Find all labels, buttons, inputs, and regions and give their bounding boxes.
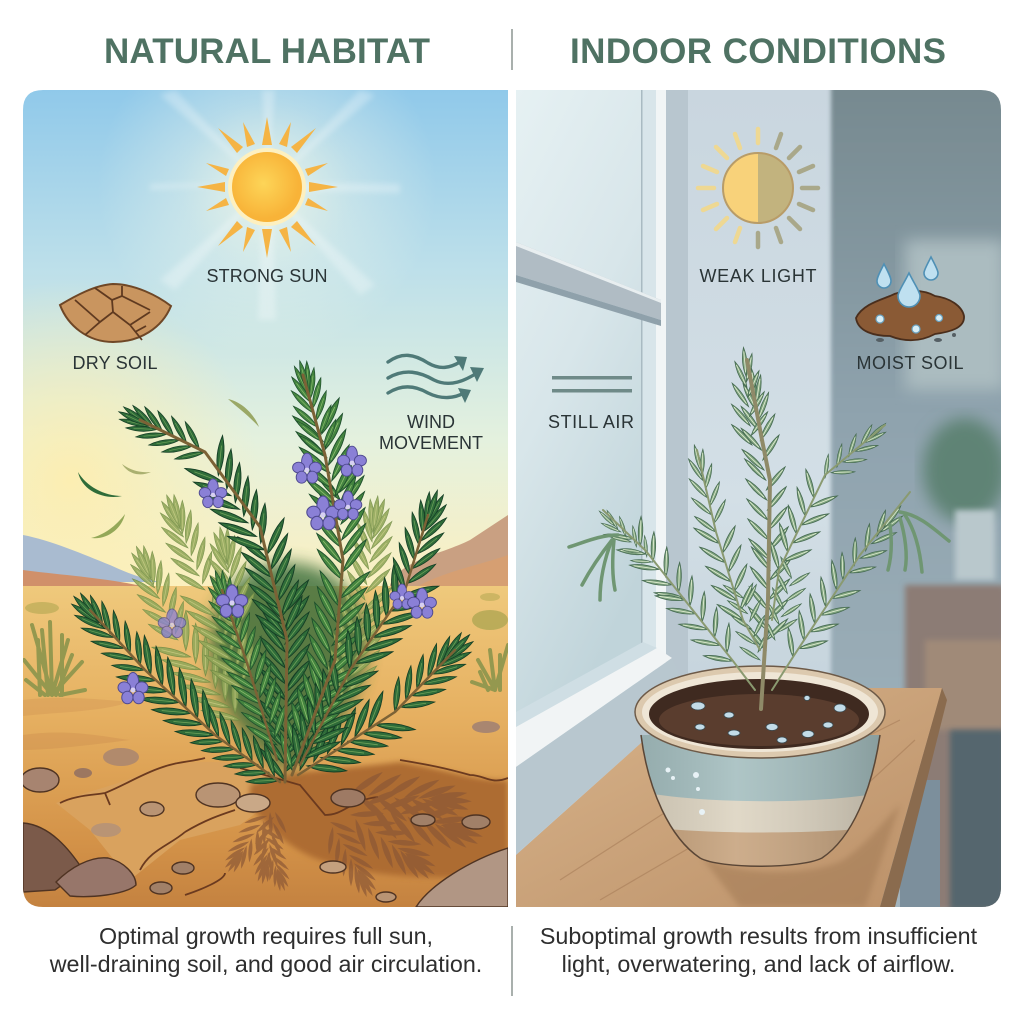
label: moist soil: MOIST SOIL — [856, 353, 964, 373]
sun glow — [23, 90, 410, 572]
foliage mass — [209, 562, 367, 770]
faded back branches — [130, 494, 393, 720]
label: dry soil: DRY SOIL — [72, 353, 158, 373]
dark room background — [831, 80, 1011, 920]
indoor rosemary plant — [569, 346, 949, 709]
icon: wind — [388, 355, 484, 403]
needles — [598, 346, 904, 662]
ground texture — [23, 593, 508, 895]
panel: natural habitat — [23, 90, 508, 907]
rosemary plant, flowering — [70, 360, 474, 784]
stems — [603, 360, 910, 709]
purple flowers — [118, 446, 436, 704]
pot shadow — [700, 805, 900, 907]
branch: upper left — [110, 393, 314, 782]
label: still air: STILL AIR — [548, 412, 634, 432]
caption: indoor conditions: Suboptimal growth results from insufficient — [540, 923, 978, 949]
sun icon — [197, 117, 338, 258]
caption: natural habitat: Optimal growth requires full sun, — [99, 923, 433, 949]
stems — [90, 375, 455, 782]
window frame — [516, 90, 688, 854]
flying leaves — [78, 399, 259, 538]
heading: indoor conditions: INDOOR CONDITIONS — [570, 32, 946, 71]
drooping tips — [569, 512, 949, 600]
branch: lower right — [292, 489, 474, 772]
window glass — [516, 90, 641, 652]
panel: indoor conditions — [516, 80, 1011, 920]
branch: inner left — [208, 570, 285, 746]
label: wind movement: MOVEMENT — [379, 433, 483, 453]
icon: still air — [552, 376, 632, 392]
distant shrubs — [24, 622, 508, 695]
room wall — [516, 90, 836, 907]
ceramic pot — [630, 666, 895, 875]
sky — [23, 90, 508, 590]
icon: moist soil — [856, 257, 964, 342]
heading: natural habitat: NATURAL HABITAT — [104, 32, 430, 71]
caption: indoor conditions: light, overwatering, and lack of airflow. — [562, 951, 955, 977]
caption: natural habitat: well-draining soil, and good air circulation. — [49, 951, 482, 977]
mountains — [23, 515, 508, 586]
label: wind movement: WIND — [407, 412, 455, 432]
plant shadow — [225, 772, 482, 897]
label: strong sun: STRONG SUN — [206, 266, 328, 286]
branch: lower left — [70, 592, 281, 784]
label: weak light: WEAK LIGHT — [700, 266, 816, 286]
weak light icon — [698, 129, 818, 247]
branch: top centre — [280, 360, 371, 771]
rocks — [21, 721, 508, 907]
wooden table — [516, 688, 947, 907]
icon: dry soil — [60, 284, 171, 342]
desert ground — [23, 586, 508, 907]
